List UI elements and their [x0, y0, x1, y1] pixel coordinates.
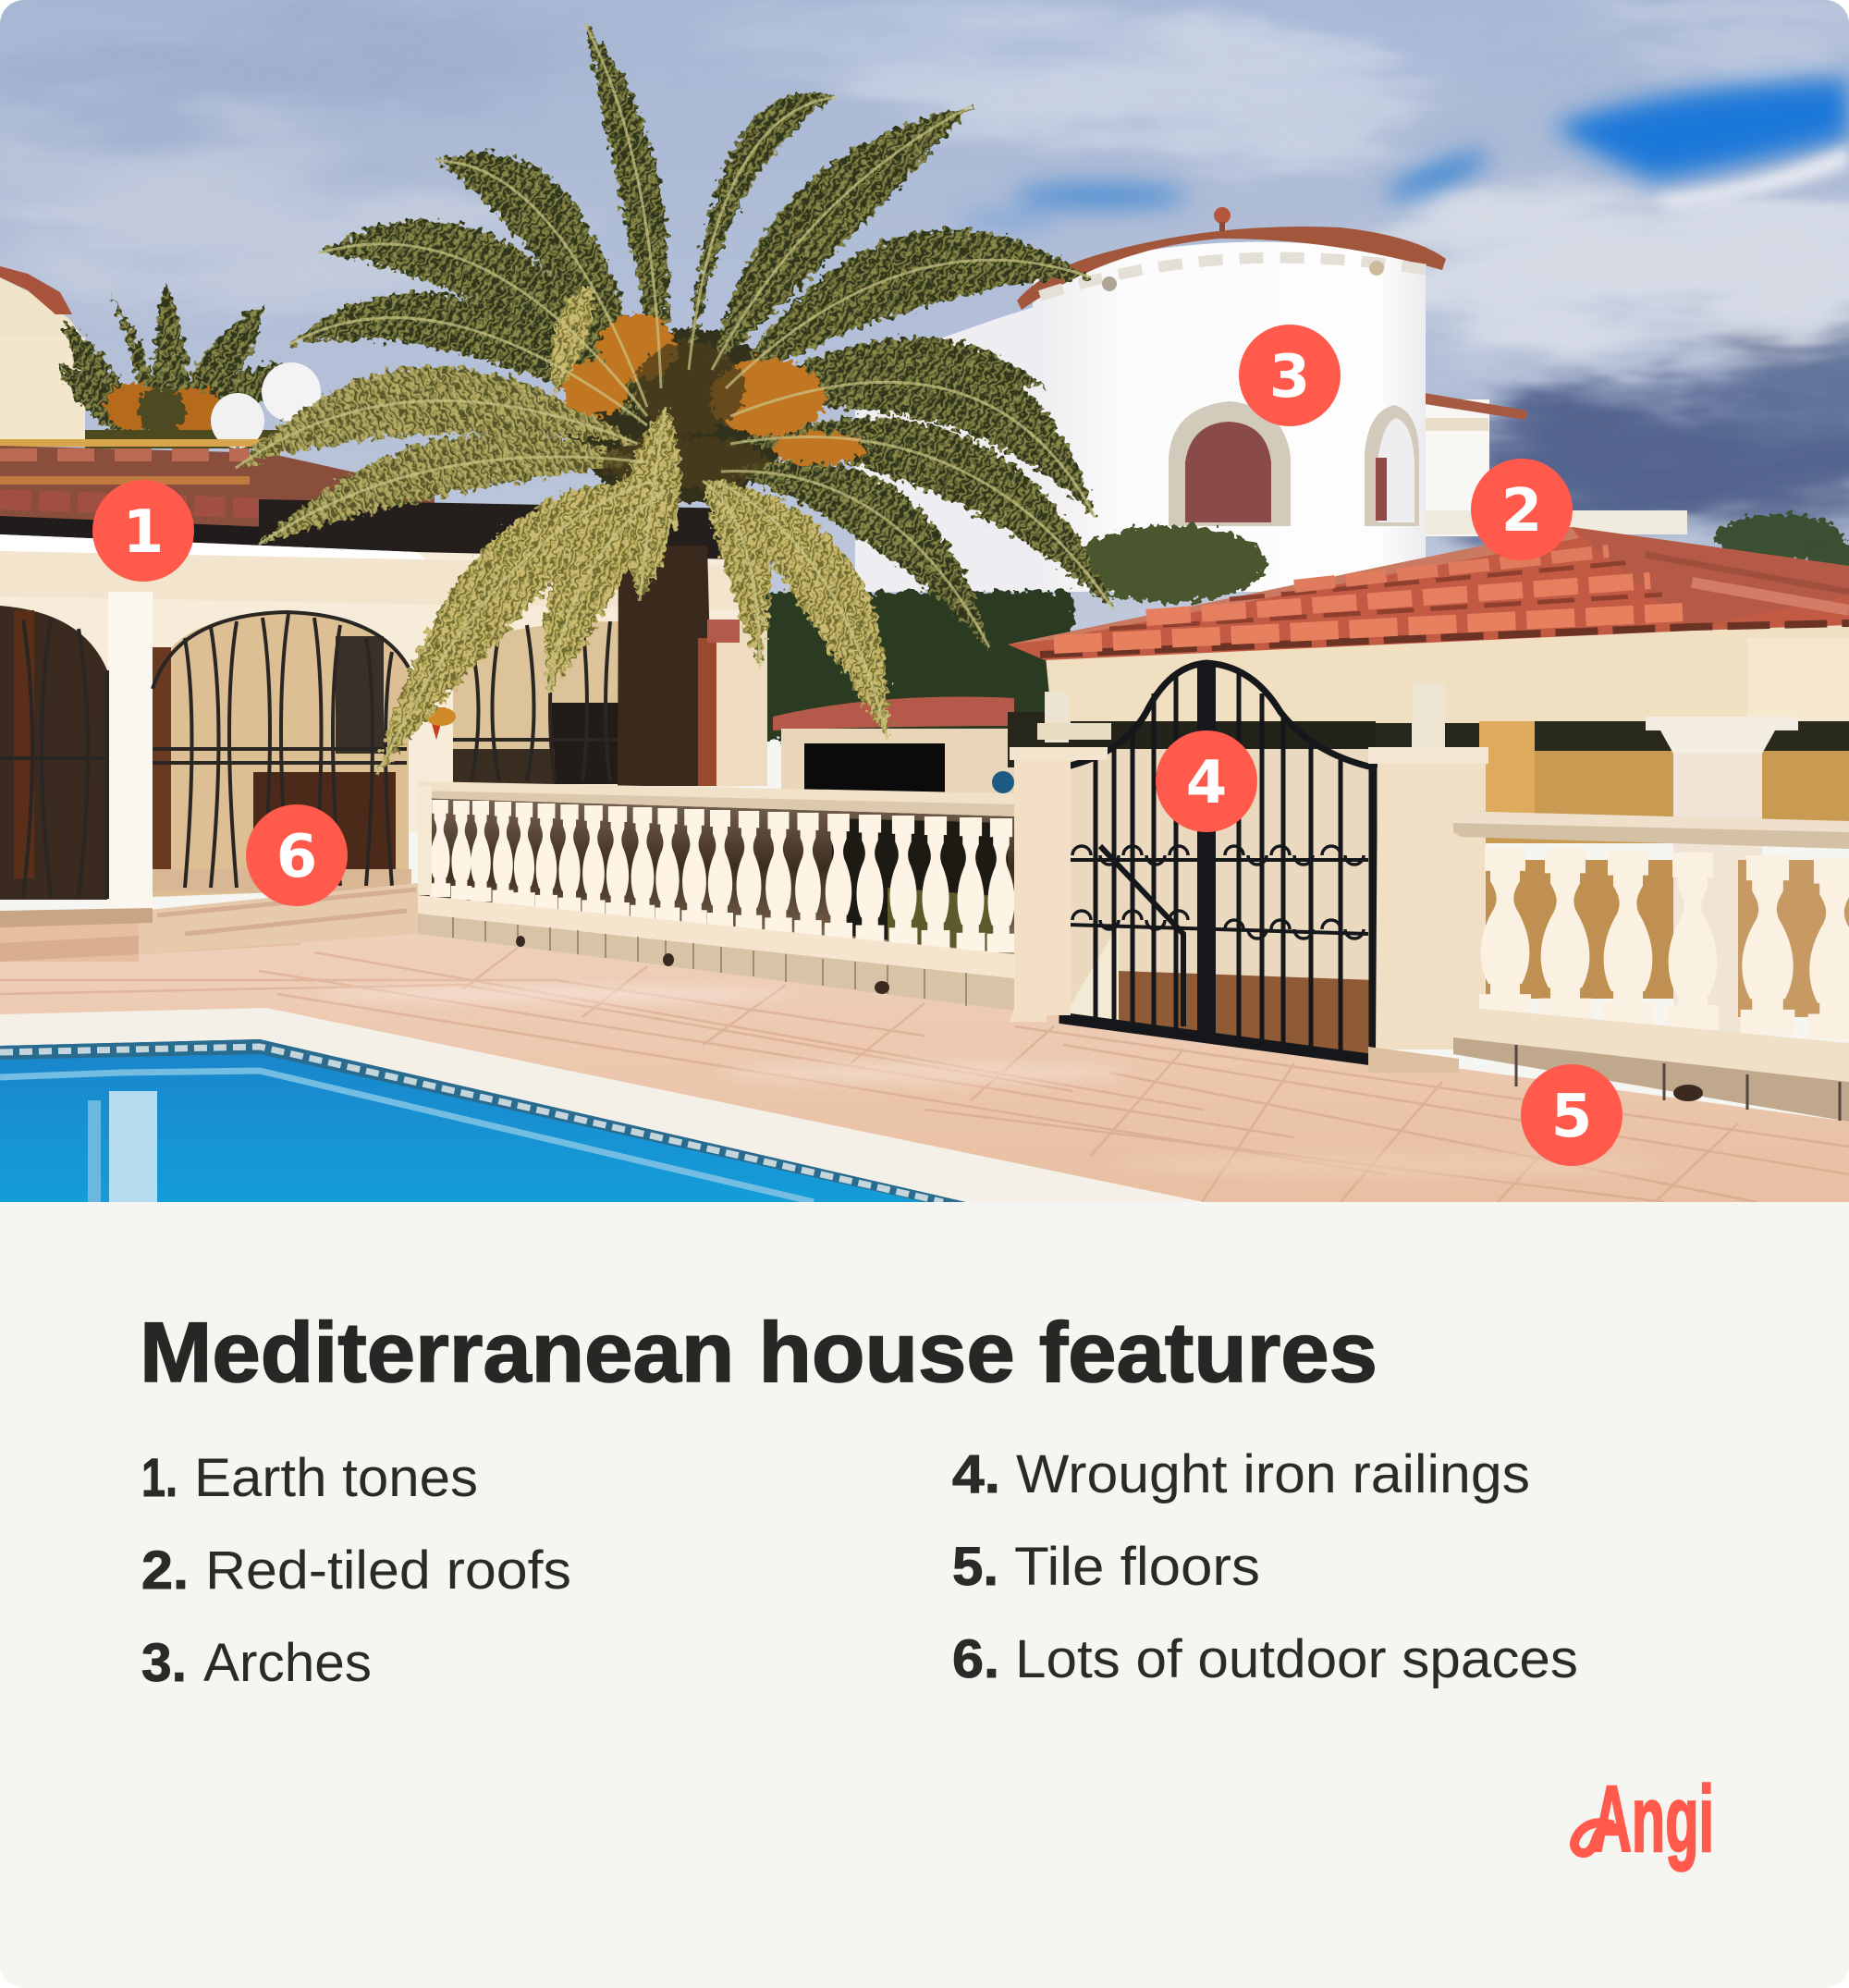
badge 3 [1239, 325, 1341, 426]
badge 6: 6 [276, 823, 317, 891]
wrought iron gate [1063, 663, 1373, 1061]
item 4: Wrought iron railings [1016, 1444, 1530, 1504]
item 3: 3. [141, 1633, 187, 1693]
item 5: 5. [952, 1537, 998, 1597]
badge 6 [246, 804, 348, 906]
logo: Angi: Angi [1592, 1768, 1714, 1871]
satellite dishes [211, 362, 321, 457]
badge 5: 5 [1551, 1083, 1592, 1151]
sky with clouds [0, 0, 1849, 740]
left house wall and roof [0, 439, 740, 911]
item 1: 1. [141, 1448, 178, 1508]
palm trunk [618, 546, 714, 786]
tower with domed tile roof and arched windows [855, 207, 1687, 592]
right balustrade [1453, 811, 1849, 1122]
small outbuilding [698, 620, 1017, 795]
patio floor with tiles [0, 929, 1849, 1202]
gate posts with lanterns [1010, 682, 1488, 1073]
badge 4: 4 [1186, 749, 1227, 817]
stone base and steps [0, 883, 418, 962]
photo: Mediterranean villa with palm and pool [0, 0, 1849, 1202]
item 4: 4. [952, 1444, 1000, 1504]
arches with iron grilles [0, 606, 621, 900]
item 1: Earth tones [194, 1448, 478, 1508]
left balustrade [418, 771, 1015, 1011]
badge 3: 3 [1269, 343, 1310, 411]
badge 2: 2 [1501, 477, 1542, 546]
palm fronds [236, 23, 1114, 775]
badge 1: 1 [123, 498, 164, 567]
logo: Angi [1574, 1768, 1714, 1871]
list: right column [952, 1444, 1578, 1689]
item 2: 2. [141, 1540, 189, 1601]
item 6: Lots of outdoor spaces [1015, 1629, 1578, 1689]
title: Mediterranean house features [140, 1306, 1378, 1400]
badge 5 [1521, 1064, 1622, 1166]
badge 1 [92, 480, 194, 582]
shrubs behind the villa [740, 514, 1849, 740]
list: left column [141, 1448, 571, 1693]
item 6: 6. [952, 1629, 999, 1689]
item 3: Arches [203, 1633, 372, 1693]
pool with coping and frieze [0, 1008, 1204, 1202]
red-tiled roof [1008, 527, 1849, 767]
item 5: Tile floors [1014, 1537, 1260, 1597]
badge 4 [1156, 730, 1257, 832]
gate surroundings and rear terrace [1063, 717, 1849, 1061]
far-left tower and small palm [0, 266, 294, 448]
item 2: Red-tiled roofs [205, 1540, 571, 1601]
badge 2 [1471, 459, 1573, 560]
